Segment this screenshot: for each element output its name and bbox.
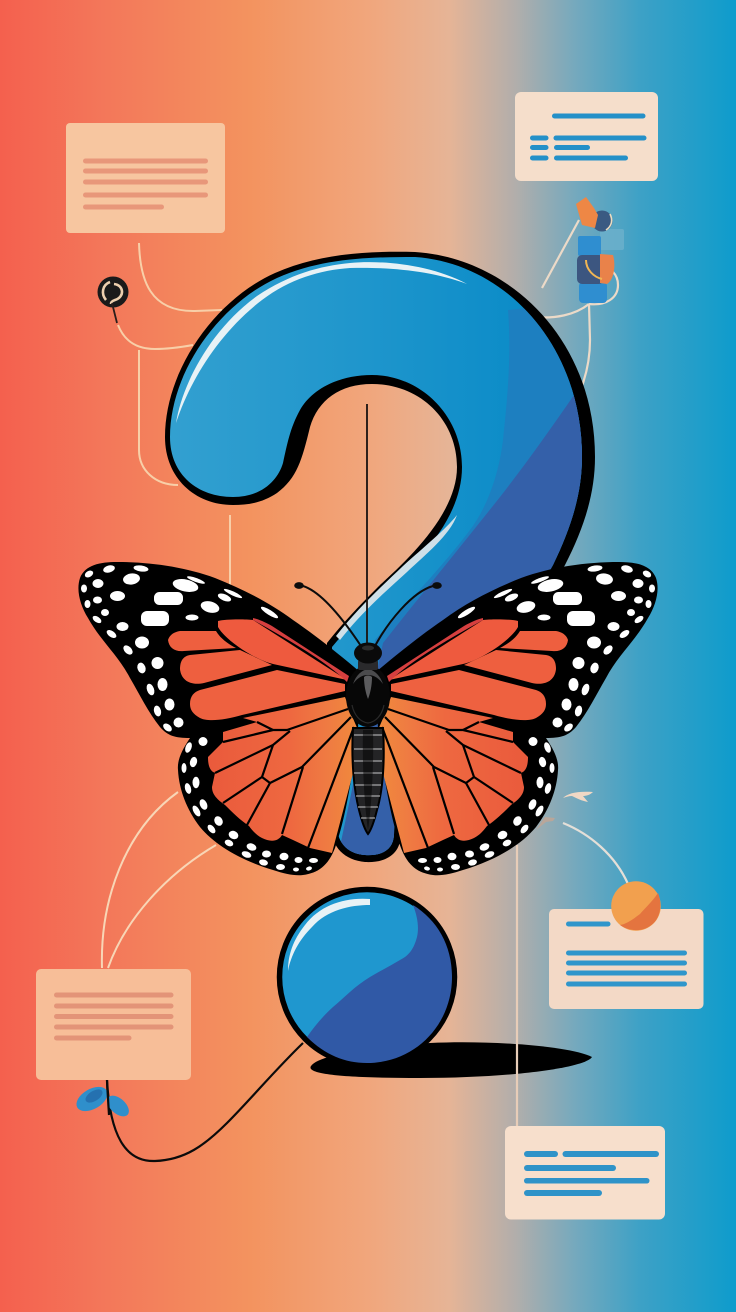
shadow under the ball [310,1042,592,1078]
panel: right note card [549,909,704,1009]
panel: lower left note card [36,969,191,1080]
connector lines: lower left [102,792,216,968]
highlight: stem [336,515,457,640]
thin vertical line through the hook [366,404,368,650]
text bars [83,158,208,210]
butterfly [78,562,658,875]
icon: blue ribbon leaves [72,1082,133,1120]
smudge at wing edge [536,817,555,830]
highlight on dot [288,899,370,971]
question mark hook and stem [160,245,600,870]
thorax [346,665,390,727]
panel: lower right note card [505,1126,665,1220]
outline [165,252,595,862]
connector lines: upper left [118,243,230,585]
connector lines: upper right [533,220,618,386]
text bars [54,992,174,1040]
vertical connector to lower right card [516,845,518,1128]
blue fill with shading [170,257,582,856]
text bars [530,114,646,160]
connector arc to orange ball [563,823,628,884]
panel: upper right note card [515,92,658,181]
icon: feather fragment [563,792,593,802]
left wings [78,562,360,875]
question mark dot [280,890,454,1064]
head [354,642,382,670]
shaded part of dot [307,905,452,1063]
icon: black knob with swirl [98,276,128,323]
highlight: top arc [176,262,467,423]
text bars [524,1151,659,1196]
antennae [295,583,441,646]
icon: orange ball [611,881,661,931]
icon: stacked blocks figure [576,197,624,303]
panel: upper left note card [66,123,225,233]
text bars [566,922,687,986]
line from card to ribbon [106,1080,109,1095]
abdomen [352,728,384,834]
black connector from dot to lower left card [107,1043,303,1161]
right wings [376,562,658,875]
